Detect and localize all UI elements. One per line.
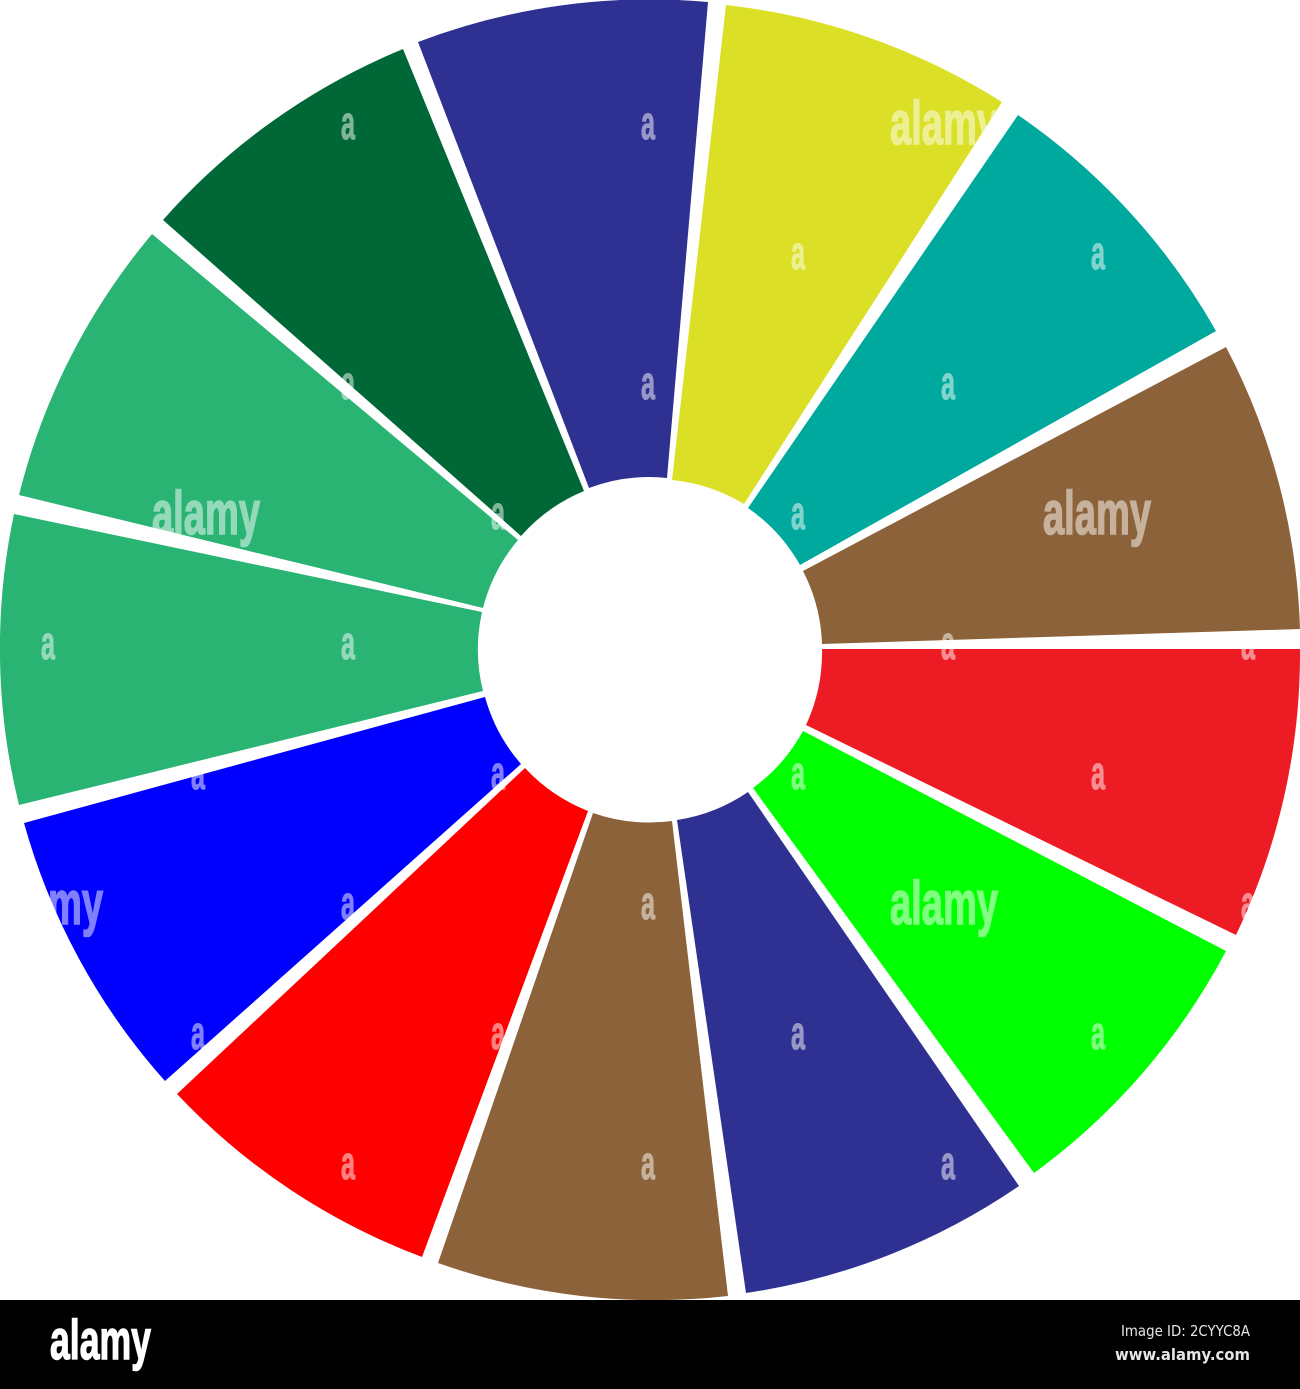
- segment: teal: [748, 115, 1216, 565]
- watermark: small repeated letters: a: [341, 356, 355, 409]
- watermark: small repeated letters: a: [941, 356, 955, 409]
- watermark: small repeated letters: a: [1241, 616, 1255, 669]
- watermark: alamy words: alamy: [890, 869, 998, 937]
- segment: dark green: [163, 49, 584, 536]
- watermark: alamy words: alamy: [1043, 479, 1151, 547]
- watermark: small repeated letters: a: [641, 1136, 655, 1189]
- segment: indigo top: [418, 0, 708, 488]
- watermark: alamy words: alamy: [152, 479, 260, 547]
- segment: blue: [24, 697, 521, 1081]
- watermark: small repeated letters: a: [1241, 876, 1255, 929]
- segment: lime green: [753, 731, 1226, 1173]
- segment: green left: [0, 514, 483, 805]
- watermark: small repeated letters: a: [341, 876, 355, 929]
- watermark: small repeated letters: a: [641, 876, 655, 929]
- segment: crimson red: [806, 649, 1300, 935]
- watermark: small repeated letters: a: [41, 616, 55, 669]
- segment: brown right: [803, 347, 1300, 644]
- footer bar: [0, 1300, 1300, 1389]
- watermark: small repeated letters: a: [1091, 746, 1105, 799]
- watermark: small repeated letters: a: [1091, 226, 1105, 279]
- segment: indigo bottom: [677, 792, 1019, 1293]
- watermark: small repeated letters: a: [491, 486, 505, 539]
- watermark: small repeated letters: a: [941, 616, 955, 669]
- watermark: small repeated letters: a: [641, 96, 655, 149]
- watermark: small repeated letters: a: [791, 486, 805, 539]
- image id: Image ID: 2CYYC8A: [1121, 1322, 1251, 1340]
- watermark: small repeated letters: a: [191, 746, 205, 799]
- segment: brown bottom: [438, 813, 728, 1300]
- watermark: small repeated letters: a: [491, 1006, 505, 1059]
- watermark: small repeated letters: a: [791, 226, 805, 279]
- segment: green upper left: [19, 234, 518, 608]
- watermark: small repeated letters: a: [941, 1136, 955, 1189]
- watermark: small repeated letters: a: [1091, 1006, 1105, 1059]
- watermark: small repeated letters: a: [791, 1006, 805, 1059]
- watermark: alamy words: alamy: [0, 869, 103, 937]
- segment: yellow: [672, 5, 1002, 504]
- watermark: small repeated letters: a: [341, 1136, 355, 1189]
- watermark: small repeated letters: [41, 96, 1255, 1189]
- watermark: small repeated letters: a: [641, 356, 655, 409]
- watermark: small repeated letters: a: [341, 616, 355, 669]
- watermark: small repeated letters: a: [341, 96, 355, 149]
- watermark: small repeated letters: a: [191, 1006, 205, 1059]
- footer logo: alamy: [50, 1308, 151, 1371]
- website: www.alamy.com: [1115, 1345, 1250, 1364]
- watermark: alamy words: alamy: [890, 89, 998, 157]
- watermark: small repeated letters: a: [791, 746, 805, 799]
- watermark: alamy words: [0, 89, 1151, 937]
- watermark: small repeated letters: a: [491, 746, 505, 799]
- segment: pure red: [177, 768, 588, 1257]
